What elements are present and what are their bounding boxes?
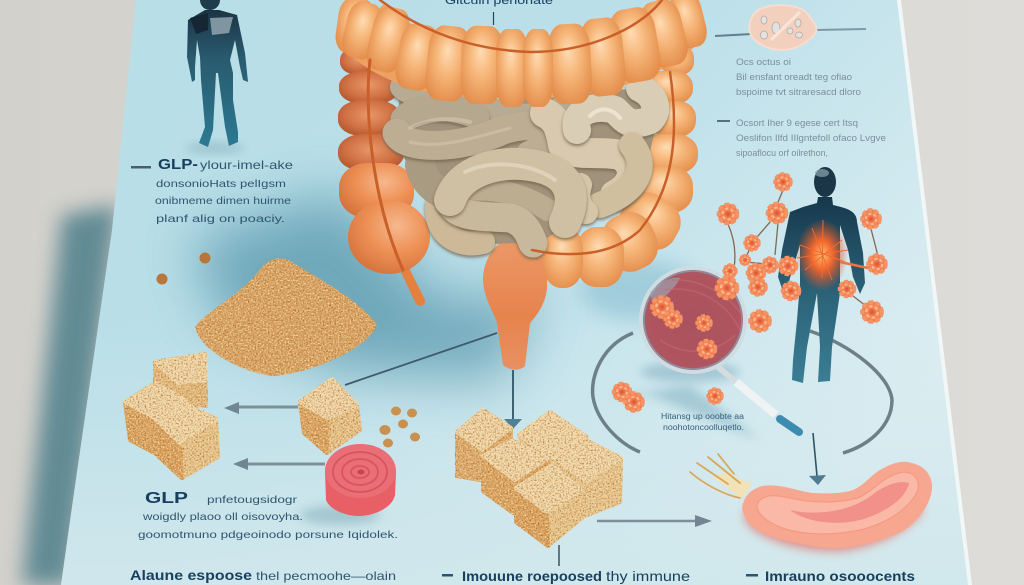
immune cell clusters [718,173,887,332]
illustration: sugar cubes left [125,354,218,478]
illustration: pink organ [742,462,932,551]
illustration: sugar cubes centre [457,410,621,546]
text block: GLP intake: ylour-imel-ake [200,158,293,172]
text block: upper right notes: Ocsort Iher 9 egese cert Itsq [736,118,858,128]
cell on lens edge [716,277,738,299]
illustration: lentils [380,406,420,448]
cluster stalks [728,190,878,306]
text block: upper right notes: bspoime tvt sitraresacd dloro [736,87,861,97]
heading: top centre label [445,0,553,25]
arrow: diagonal connector [345,333,497,385]
magnifier handle [718,367,799,432]
text block: GLP description: goomotmuno pdgeoinodo porsune Iqidolek. [138,530,398,541]
panel drop shadow [22,205,118,585]
icon: golden fork [690,454,752,501]
text block: GLP intake: donsonioHats pelIgsm [156,178,286,190]
small intestine [397,82,655,245]
loose immune cells [613,383,723,412]
caption: immune response [442,568,690,584]
illustration: red roll [300,444,396,525]
caption: magnifier note [661,412,745,432]
text block: GLP description: GLP [145,490,188,507]
diagram: intestines [333,0,710,370]
text block: upper right notes: Bil ensfant oreadt teg ofiao [736,72,852,82]
colon cast shadow [190,190,760,440]
illustration: sugar cube centre [300,379,360,453]
illustration: sugar pile [195,258,377,376]
figure: small human silhouette top left [185,0,248,153]
icon: tissue cross-section [715,5,866,50]
caption: immune components: Imrauno osooocents [765,568,915,584]
text block: GLP description: pnfetougsidogr [207,495,298,506]
arrows: left pointing arrows [224,402,325,470]
lens cells [651,296,716,358]
caption: bottom left [130,568,396,583]
icon: small granules [156,252,210,284]
descending colon [543,45,698,288]
caption: bottom left: Alaune espoose [130,568,253,583]
magnifying glass [640,268,799,432]
blood vessels [368,0,674,270]
text block: upper right notes: Oeslifon Ilfd IIlgntefoll ofaco Lvgve [736,133,886,143]
caption: immune response: thy immune [606,568,690,584]
rectum [483,236,548,370]
caption: immune response: Imouune roepoosed [462,568,602,584]
text block: GLP intake: planf alig on poaciy. [156,213,285,225]
arrow: connector down [558,545,560,566]
inflamed gut glow [796,219,848,291]
caption: bottom left: thel pecmoohe—olain [256,569,396,583]
arrow: down from rectum [504,370,522,429]
caption: magnifier note: noohotoncoolluqetlo. [663,423,744,432]
text block: upper right notes [717,57,886,158]
caecum [339,163,430,274]
transverse colon [333,0,710,107]
arrow: down to organ [809,433,826,485]
arrow: to organ [597,515,712,527]
caption: magnifier note: Hitansg up ooobte aa [661,412,745,421]
text block: GLP intake: onibmeme dimen huirme [155,195,291,207]
figure: human with inflammation [778,167,868,383]
text block: GLP description: woigdly plaoo oll oisovoyha. [142,511,303,523]
text block: upper right notes: Ocs octus oi [736,57,791,67]
text block: GLP description [138,490,398,541]
appendix [399,266,425,306]
ascending colon [338,48,404,171]
text block: upper right notes: sipoaflocu orf oilrethon, [736,148,828,158]
text block: GLP intake: GLP- [158,156,198,173]
ring around figure [593,331,892,453]
text block: GLP intake [131,156,293,225]
